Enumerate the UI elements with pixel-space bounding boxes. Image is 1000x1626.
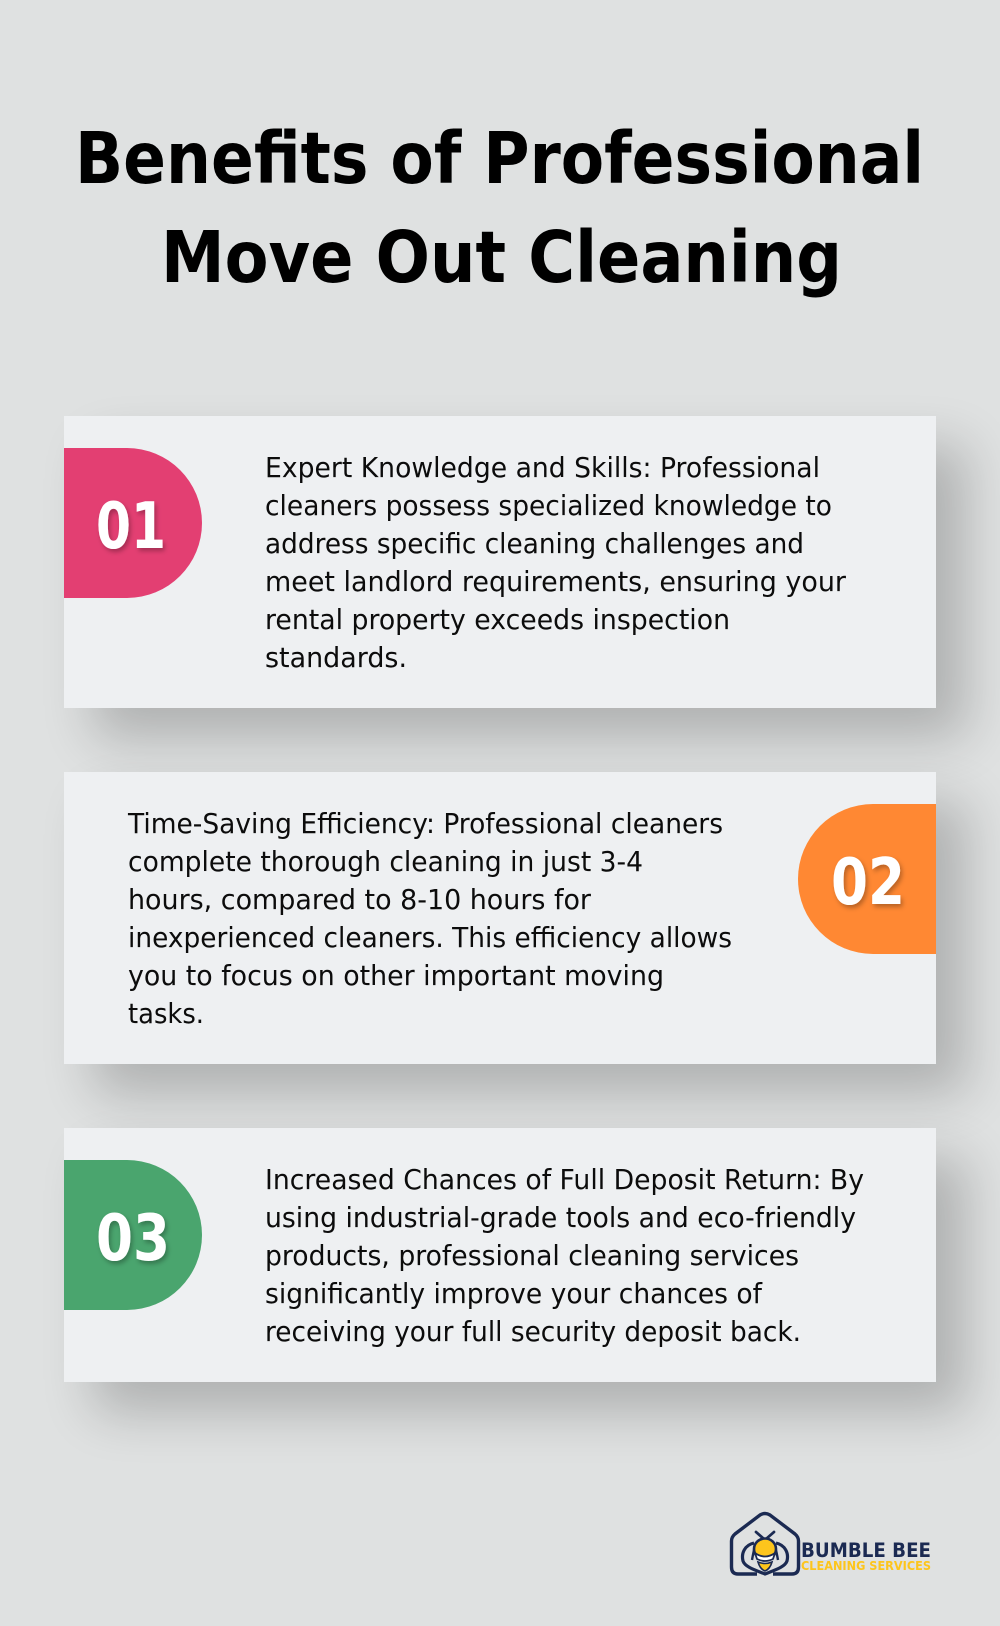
- badge: 03: [64, 1160, 202, 1310]
- text: full deposit return: Increased Chances of Full Deposit Return: By: [265, 1164, 864, 1196]
- badge: 03: 03: [96, 1202, 170, 1276]
- text: full deposit return: significantly improve your chances of: [265, 1278, 763, 1310]
- text: time-saving efficiency: [127, 808, 732, 1030]
- icon: house with bee: [732, 1514, 798, 1574]
- text: time-saving efficiency: hours, compared to 8-10 hours for: [128, 884, 592, 916]
- text: expert knowledge: cleaners possess specialized knowledge to: [265, 490, 832, 522]
- panel: card 2: [64, 772, 966, 1094]
- badge: 02: [798, 804, 936, 954]
- text: expert knowledge: Expert Knowledge and Skills: Professional: [265, 452, 820, 484]
- text: full deposit return: receiving your full security deposit back.: [265, 1316, 801, 1348]
- text: full deposit return: products, professional cleaning services: [265, 1240, 799, 1272]
- text: full deposit return: [265, 1164, 864, 1348]
- badge: 01: [64, 448, 202, 598]
- panel: card 3: [64, 1128, 966, 1412]
- logo: Bumble Bee Cleaning Services: BUMBLE BEE: [801, 1539, 931, 1562]
- text: full deposit return: using industrial-grade tools and eco-friendly: [265, 1202, 856, 1234]
- badge: 02: 02: [831, 846, 905, 920]
- text: expert knowledge: standards.: [265, 642, 407, 674]
- badge: 01: 01: [96, 490, 166, 564]
- text: time-saving efficiency: you to focus on other important moving: [128, 960, 664, 992]
- panel: card 1: [64, 416, 966, 738]
- text: expert knowledge: meet landlord requirements, ensuring your: [265, 566, 847, 598]
- text: time-saving efficiency: complete thorough cleaning in just 3-4: [128, 846, 643, 878]
- title: Move Out Cleaning: [161, 216, 842, 299]
- text: expert knowledge: [265, 452, 847, 674]
- text: expert knowledge: rental property exceeds inspection: [265, 604, 730, 636]
- text: time-saving efficiency: inexperienced cleaners. This efficiency allows: [128, 922, 732, 954]
- text: expert knowledge: address specific cleaning challenges and: [265, 528, 804, 560]
- text: time-saving efficiency: tasks.: [128, 998, 204, 1030]
- logo: Bumble Bee Cleaning Services: CLEANING SERVICES: [801, 1559, 931, 1573]
- text: time-saving efficiency: Time-Saving Efficiency: Professional cleaners: [127, 808, 723, 840]
- logo: Bumble Bee Cleaning Services: [732, 1514, 931, 1574]
- title: [75, 117, 924, 299]
